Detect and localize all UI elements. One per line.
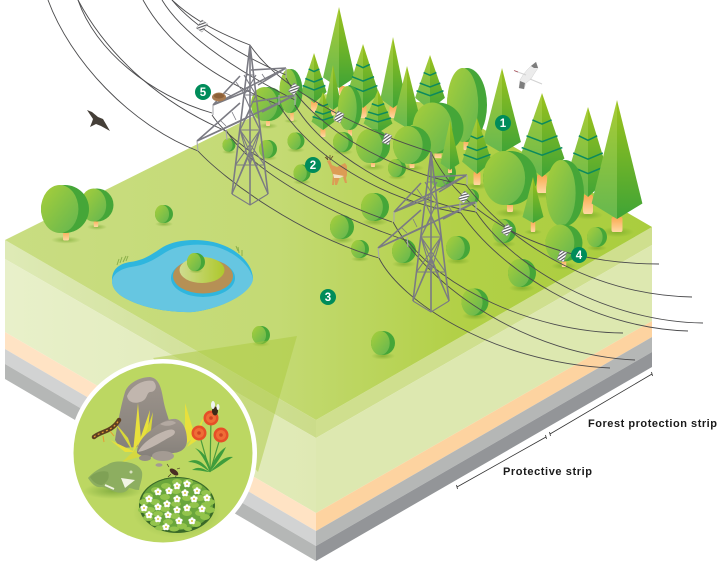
tall rock [115,377,175,448]
badge 3: 3 [325,292,331,304]
transmission tower 1 [197,45,295,205]
salamander [94,420,119,442]
isometric ground block [5,93,652,561]
front rock [137,419,187,467]
forest strip trees [222,7,642,237]
number badges [195,84,587,305]
bee [211,401,220,416]
badge 1 [495,115,511,131]
badge 4: 4 [576,250,583,262]
pond with island [112,240,253,312]
dimension line: forest protection strip [550,372,652,436]
badge 3 [320,289,336,305]
cockroach [167,464,180,479]
free-standing trees on the left [41,185,114,244]
label: forest protection strip: Forest protection strip [588,418,717,430]
dimension line: protective strip [456,435,546,489]
badge 5 [195,84,211,100]
icon: deer [325,155,347,185]
protective strip shrubs [155,193,607,360]
badge 2: 2 [310,160,316,172]
icon: bird nest [212,92,226,102]
right side layers [316,227,652,561]
shrubs among the forest [222,132,479,205]
inset: biodiversity circle [69,359,257,547]
badge 4 [571,247,587,263]
frog [83,461,143,499]
left side layers [5,240,316,561]
label: protective strip: Protective strip [503,466,592,478]
wire markers [196,20,567,262]
badge 1: 1 [500,118,507,130]
badge 5: 5 [200,87,207,99]
top surface [5,93,652,420]
red flowers [188,410,233,472]
icon: swallow silhouette [87,110,110,131]
icon: flying crane [514,62,542,89]
badge 2 [305,157,321,173]
transmission tower 2 [378,152,476,312]
yellow grass blades [110,403,205,462]
white-flower shrub [133,477,221,538]
inset zoom beam [153,336,297,472]
power lines [48,0,703,368]
